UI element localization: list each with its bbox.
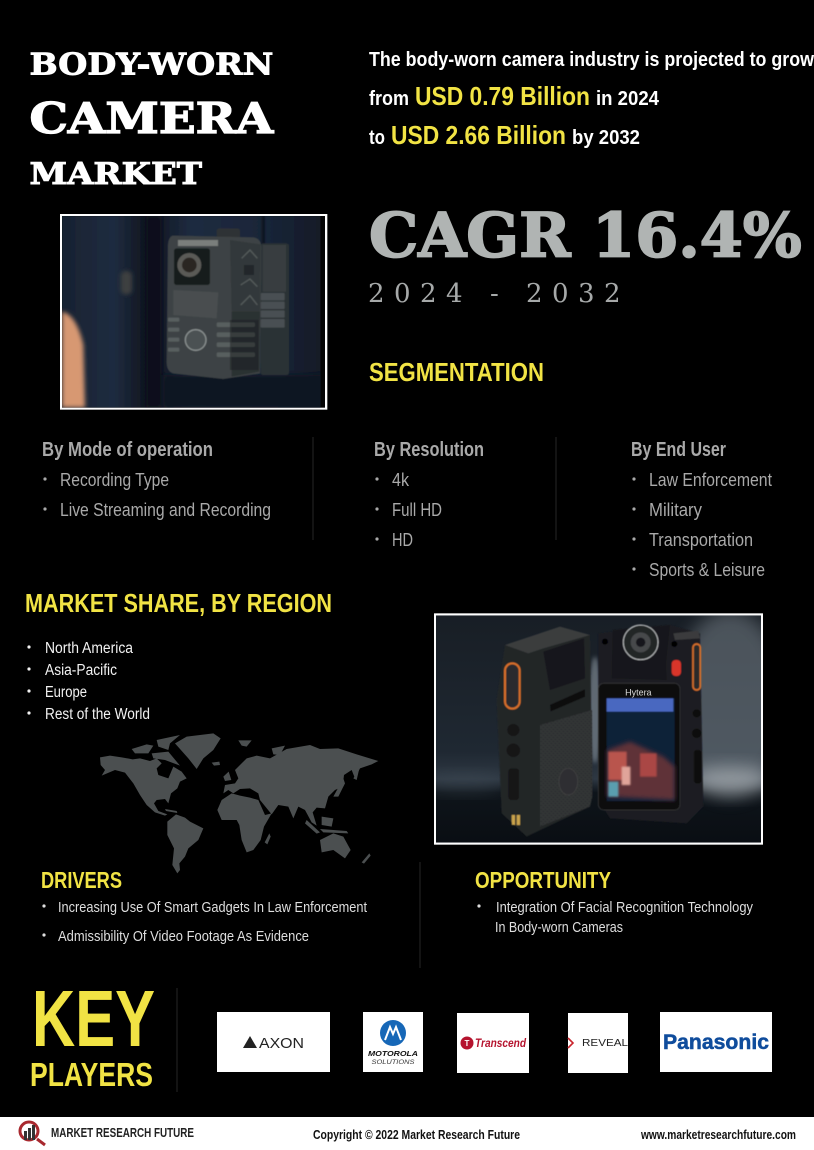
drivers list: Increasing Use Of Smart Gadgets In Law Enforcement (58, 900, 367, 916)
footer bar: Copyright © 2022 Market Research Future (313, 1128, 520, 1142)
heading: segmentation: SEGMENTATION (369, 357, 544, 387)
logo: Reveal: REVEAL (582, 1038, 629, 1049)
logo: Transcend (457, 1013, 529, 1073)
segment: by resolution: HD (392, 530, 413, 550)
opportunity text: In Body-worn Cameras (495, 920, 623, 936)
heading: opportunity: OPPORTUNITY (475, 867, 611, 893)
photo: Hytera body cameras: Hytera (625, 687, 652, 697)
world map (100, 733, 378, 873)
market projection text: USD 2.66 Billion (391, 120, 566, 150)
segment: by mode of operation: Live Streaming and Recording (60, 500, 271, 520)
region list: Europe (45, 684, 87, 701)
opportunity text (477, 900, 754, 936)
photo: Hytera body cameras (434, 613, 763, 845)
market projection text (369, 48, 814, 150)
footer logo icon (20, 1122, 45, 1145)
segment: by end user: Law Enforcement (649, 470, 772, 490)
region list (27, 640, 150, 723)
region list: North America (45, 640, 133, 657)
drivers list: Admissibility Of Video Footage As Evidence (58, 929, 309, 945)
segment: by resolution: 4k (392, 470, 410, 490)
market projection text: by 2032 (572, 126, 640, 149)
segment: by resolution: By Resolution (374, 439, 484, 461)
logo: Axon: AXON (259, 1035, 304, 1052)
heading: drivers: DRIVERS (41, 867, 122, 893)
forecast period: 2024 - 2032 (368, 279, 621, 309)
market projection text: in 2024 (596, 87, 660, 110)
title (30, 47, 274, 191)
segment: by end user (631, 439, 772, 580)
segment: by end user: Military (649, 500, 702, 520)
segment: by end user: Sports & Leisure (649, 560, 765, 580)
market projection text: USD 0.79 Billion (415, 81, 590, 111)
opportunity text: Integration Of Facial Recognition Technology (496, 900, 754, 916)
logo: Transcend: Transcend (475, 1036, 527, 1050)
segment: by resolution (374, 439, 484, 550)
heading: key players (30, 974, 155, 1093)
logo: Axon (217, 1012, 330, 1072)
segment: by end user: By End User (631, 439, 726, 461)
heading: market share by region: MARKET SHARE, BY REGION (25, 588, 332, 618)
segment: by end user: Transportation (649, 530, 753, 550)
logo: Panasonic (660, 1012, 772, 1072)
segment: by mode of operation: By Mode of operation (42, 439, 213, 461)
photo: body camera on uniform (60, 214, 327, 410)
heading: key players: PLAYERS (30, 1056, 153, 1093)
segment: by mode of operation: Recording Type (60, 470, 169, 490)
logo: Motorola Solutions (363, 1012, 423, 1072)
segment: by resolution: Full HD (392, 500, 442, 520)
market projection text: from (369, 87, 409, 110)
market projection text: to (369, 126, 385, 149)
logo: Reveal (568, 1013, 629, 1073)
title: CAMERA (30, 94, 274, 143)
logo: Motorola Solutions: SOLUTIONS (372, 1059, 415, 1066)
logo: Panasonic: Panasonic (663, 1031, 769, 1054)
drivers list (42, 900, 367, 945)
region list: Asia-Pacific (45, 662, 117, 679)
title: BODY-WORN (30, 47, 273, 82)
title: MARKET (30, 157, 202, 191)
heading: key players: KEY (32, 974, 155, 1063)
region list: Rest of the World (45, 706, 150, 723)
logo: Transcend: T (465, 1039, 470, 1048)
footer bar (0, 1117, 814, 1150)
logo: Motorola Solutions: MOTOROLA (368, 1051, 418, 1058)
footer bar: MARKET RESEARCH FUTURE (51, 1126, 194, 1140)
CAGR figure: CAGR 16.4% (369, 200, 802, 271)
segment: by mode of operation (42, 439, 271, 520)
